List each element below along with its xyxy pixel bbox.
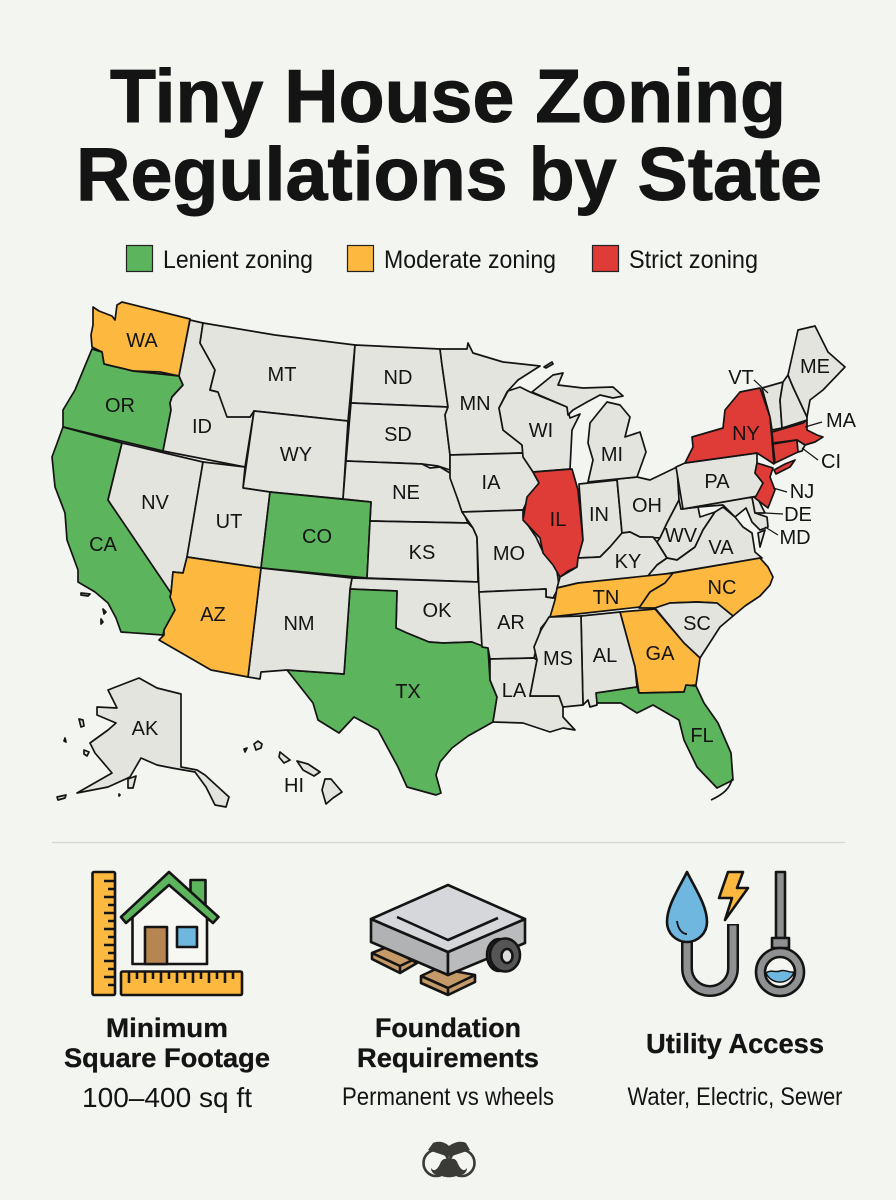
icon: house with rulers: [92, 872, 242, 995]
state: ND: [351, 345, 448, 407]
heading: Foundation: [375, 1013, 521, 1043]
state: SC: SC: [683, 613, 711, 635]
state: ND: ND: [384, 367, 412, 389]
state: UT: [187, 462, 270, 568]
divider: [52, 842, 845, 844]
state: IL: IL: [550, 509, 566, 531]
state: NV: [108, 443, 203, 593]
state: GA: [620, 609, 700, 693]
islands: Alaska: [57, 719, 136, 800]
legend: [126, 246, 758, 274]
state: MI upper: [532, 373, 623, 415]
state: NC: [639, 558, 773, 616]
state: WA: [91, 302, 190, 376]
state: KY: KY: [615, 551, 641, 573]
state: UT: UT: [216, 511, 242, 533]
state: GA: GA: [646, 643, 675, 665]
state: MN: MN: [459, 393, 491, 415]
state: VA eastern shore: [758, 530, 765, 547]
state: HI: [244, 741, 342, 804]
legend item: lenient: Lenient zoning: [163, 246, 313, 274]
state: VT: [762, 382, 783, 430]
state: WV: WV: [665, 525, 698, 547]
state: NM: NM: [283, 613, 315, 635]
state: AK: AK: [132, 718, 159, 740]
title: [76, 54, 822, 216]
state: TX: [287, 589, 497, 795]
state: IA: [450, 453, 539, 512]
state: IN: IN: [589, 504, 609, 526]
state: SD: SD: [384, 424, 412, 446]
callout labels: CI: [821, 451, 841, 473]
title: Regulations by State: [76, 132, 822, 216]
legend item: strict: Strict zoning: [629, 246, 758, 274]
state: ID: [163, 320, 254, 467]
value: Water, Electric, Sewer: [628, 1083, 842, 1111]
US map: [52, 302, 857, 807]
state: OR: [63, 349, 183, 451]
panel: foundation requirements: [342, 885, 554, 1111]
state: NJ: [755, 463, 775, 508]
icon: mustache logo: [424, 1142, 474, 1177]
heading: [64, 1013, 270, 1073]
state: NH: [780, 375, 807, 428]
state: VA: VA: [708, 537, 734, 559]
state: MA: [772, 420, 823, 445]
state: HI: HI: [284, 775, 304, 797]
state: KS: KS: [409, 542, 435, 564]
islands: Florida keys: [711, 779, 732, 800]
state: AR: [479, 589, 557, 659]
leader lines: [754, 380, 822, 535]
state: LA: LA: [502, 680, 527, 702]
state: FL: FL: [690, 725, 714, 747]
icon: water, electric, sewer: [667, 872, 804, 996]
state: TX: TX: [395, 681, 421, 703]
state: MS: [530, 616, 583, 707]
state: AR: AR: [497, 612, 525, 634]
state: AK: [77, 678, 229, 807]
islands: California: [81, 593, 106, 624]
state: CO: [261, 492, 371, 578]
island: Isle Royale: [544, 362, 553, 368]
state: IA: IA: [482, 472, 501, 494]
state: MO: [462, 510, 559, 598]
state: SD: [346, 403, 450, 470]
heading: Square Footage: [64, 1043, 270, 1073]
state: CT: [773, 440, 798, 463]
state: WY: WY: [280, 444, 312, 466]
state: MO: MO: [493, 543, 525, 565]
state: NE: NE: [392, 482, 420, 504]
heading: Requirements: [357, 1043, 539, 1073]
state: KY: [557, 532, 667, 588]
panel: minimum square footage: [64, 872, 270, 1113]
callout labels: MD: [779, 527, 811, 549]
state: WI: WI: [529, 420, 553, 442]
state: PA: PA: [704, 471, 730, 493]
state: PA: [676, 453, 765, 509]
state: WV: [657, 500, 715, 560]
callout labels: VT: [728, 367, 754, 389]
state: CA: CA: [89, 534, 118, 556]
state: DE: [752, 497, 765, 513]
value: 100–400 sq ft: [82, 1082, 252, 1113]
state: WI: [499, 387, 580, 472]
state: RI: [797, 440, 805, 452]
heading: Minimum: [106, 1013, 228, 1043]
state: WY: [243, 411, 348, 499]
callout labels: [728, 367, 857, 549]
state: CA: [52, 427, 175, 635]
state: NY: [685, 388, 774, 464]
icon: foundation slab with blocks and wheel: [371, 885, 525, 995]
state: NY: NY: [732, 423, 760, 445]
state: KS: [367, 521, 478, 582]
state: AL: [581, 612, 637, 707]
state: MD: [681, 497, 768, 530]
state: MI lower: [588, 402, 646, 482]
state: CO: CO: [302, 526, 332, 548]
callout labels: DE: [784, 504, 812, 526]
title: Tiny House Zoning: [110, 54, 786, 138]
state: MT: [200, 323, 355, 421]
state: ME: ME: [800, 356, 830, 378]
panel: utility access: [628, 872, 842, 1111]
state: NE: [343, 461, 468, 523]
state: FL: [596, 685, 733, 788]
state: MS: MS: [543, 648, 573, 670]
state: WA: WA: [126, 330, 158, 352]
state: NM: [248, 568, 352, 679]
state: SC: [655, 602, 733, 658]
state: MN: [440, 343, 540, 455]
state: OH: OH: [632, 495, 662, 517]
state: MT: MT: [268, 364, 296, 386]
state: MI lower: MI: [601, 444, 623, 466]
state: OR: OR: [105, 395, 135, 417]
state: ID: ID: [192, 416, 212, 438]
state: NC: NC: [708, 577, 736, 599]
state: LA: [490, 658, 575, 732]
state: OK: OK: [423, 600, 452, 622]
state: ME: [788, 326, 845, 417]
state: Long Island: [774, 460, 795, 474]
state: AL: AL: [593, 645, 617, 667]
state: VA: [647, 507, 762, 577]
legend item: moderate: Moderate zoning: [384, 246, 556, 274]
heading: Utility Access: [646, 1028, 824, 1059]
state: IL: [523, 469, 583, 577]
callout labels: NJ: [790, 481, 814, 503]
state: TN: [550, 573, 674, 617]
state: OK: [350, 578, 482, 647]
state: IN: [578, 480, 622, 558]
state: NV: NV: [141, 492, 170, 514]
heading: [357, 1013, 539, 1073]
state: AZ: [159, 557, 261, 677]
state: TN: TN: [593, 587, 619, 609]
state: AZ: AZ: [200, 604, 226, 626]
value: Permanent vs wheels: [342, 1083, 554, 1111]
callout labels: MA: [826, 410, 857, 432]
state: OH: [617, 467, 679, 538]
